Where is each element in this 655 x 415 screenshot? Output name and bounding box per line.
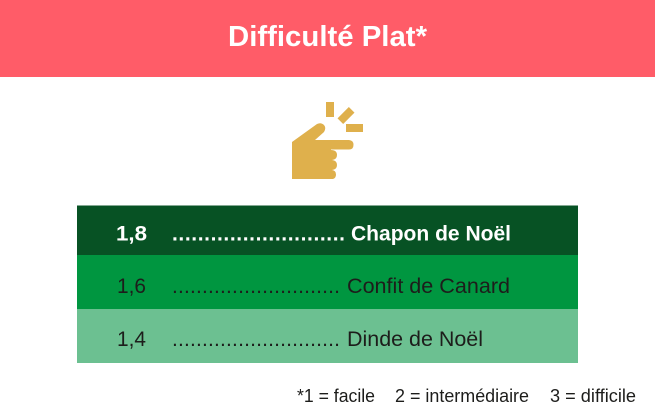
row: Chapon de Noël: 1,8: [116, 222, 147, 246]
title: Difficulté Plat*: [228, 21, 428, 53]
footnote: scale legend: [297, 386, 636, 406]
row: Confit de Canard: [77, 255, 578, 309]
row: Chapon de Noël: ...........................: [172, 222, 345, 246]
row: Dinde de Noël: [77, 309, 578, 363]
footnote: scale legend: *1 = facile: [297, 386, 375, 406]
row: Chapon de Noël: Chapon de Noël: [351, 222, 511, 246]
row: Dinde de Noël: 1,4: [117, 328, 146, 351]
row: Dinde de Noël: ............................: [172, 328, 340, 351]
table: difficulty ranking: [77, 206, 578, 363]
row: Confit de Canard: ............................: [172, 275, 340, 298]
icon: finger snap hand: [292, 102, 363, 179]
row: Confit de Canard: 1,6: [117, 275, 146, 298]
row: Confit de Canard: Confit de Canard: [347, 275, 510, 298]
footnote: scale legend: 2 = intermédiaire: [395, 386, 529, 406]
header banner: [0, 0, 655, 77]
footnote: scale legend: 3 = difficile: [550, 386, 636, 406]
row: Dinde de Noël: Dinde de Noël: [347, 328, 483, 351]
row: Chapon de Noël: [77, 206, 578, 255]
